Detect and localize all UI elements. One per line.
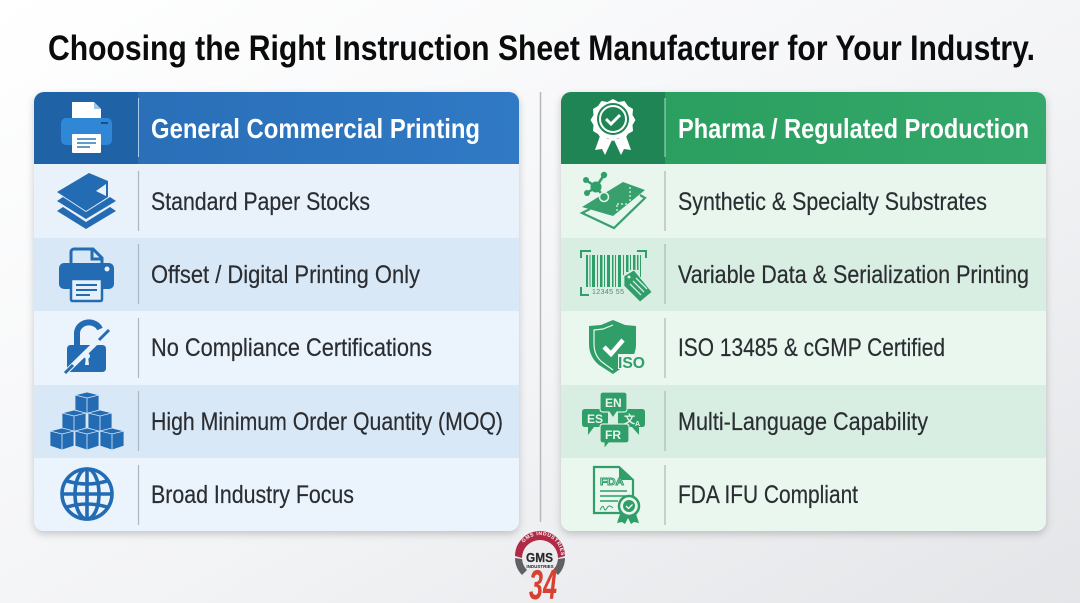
language labels: A [635,421,640,428]
row text: broad industry focus: Broad Industry Focus [151,481,354,509]
icon: synthetic substrate [582,172,645,228]
barcode digits: 12345 55 [592,289,624,296]
icon: award ribbon [590,99,636,155]
center divider [540,92,542,522]
icon: pyramid of boxes [50,392,124,450]
icon: crossed out padlock [65,322,109,373]
language labels: FR [605,428,621,442]
row text: multi-language: Multi-Language Capability [678,408,928,436]
row text: standard paper stocks: Standard Paper Stocks [151,188,370,216]
icon: printer [59,249,114,301]
icon: globe [62,469,112,519]
row text: variable data: Variable Data & Serialization Printing [678,261,1029,289]
language labels: ES [587,412,603,426]
language labels [587,396,640,442]
logo industries: INDUSTRIES [526,564,554,569]
row text: iso certified: ISO 13485 & cGMP Certified [678,334,945,362]
row text: synthetic substrates: Synthetic & Specialty Substrates [678,188,987,216]
row text: high moq: High Minimum Order Quantity (MOQ) [151,408,503,436]
panel: general commercial printing [34,92,519,531]
row text: no compliance: No Compliance Certifications [151,334,432,362]
icon: header printer [61,102,112,153]
row text: offset digital: Offset / Digital Printing Only [151,261,420,289]
icon: iso shield [589,320,646,374]
language labels: EN [605,396,622,410]
heading: general commercial printing: General Commercial Printing [151,113,480,144]
icon: language speech bubbles [582,392,645,449]
icon: barcode tag [581,251,652,302]
iso label: ISO [618,355,645,372]
logo band text: GMS INDUSTRIES [522,532,564,556]
row text: fda ifu: FDA IFU Compliant [678,481,858,509]
fda label: FDA [600,477,624,488]
icon: fda document [594,467,639,524]
language labels: 文 [624,412,636,426]
logo gms: GMS [526,550,553,565]
icon: paper stack [57,173,116,229]
logo: gms industries 34 [515,531,565,603]
panel: pharma regulated production [561,92,1046,531]
